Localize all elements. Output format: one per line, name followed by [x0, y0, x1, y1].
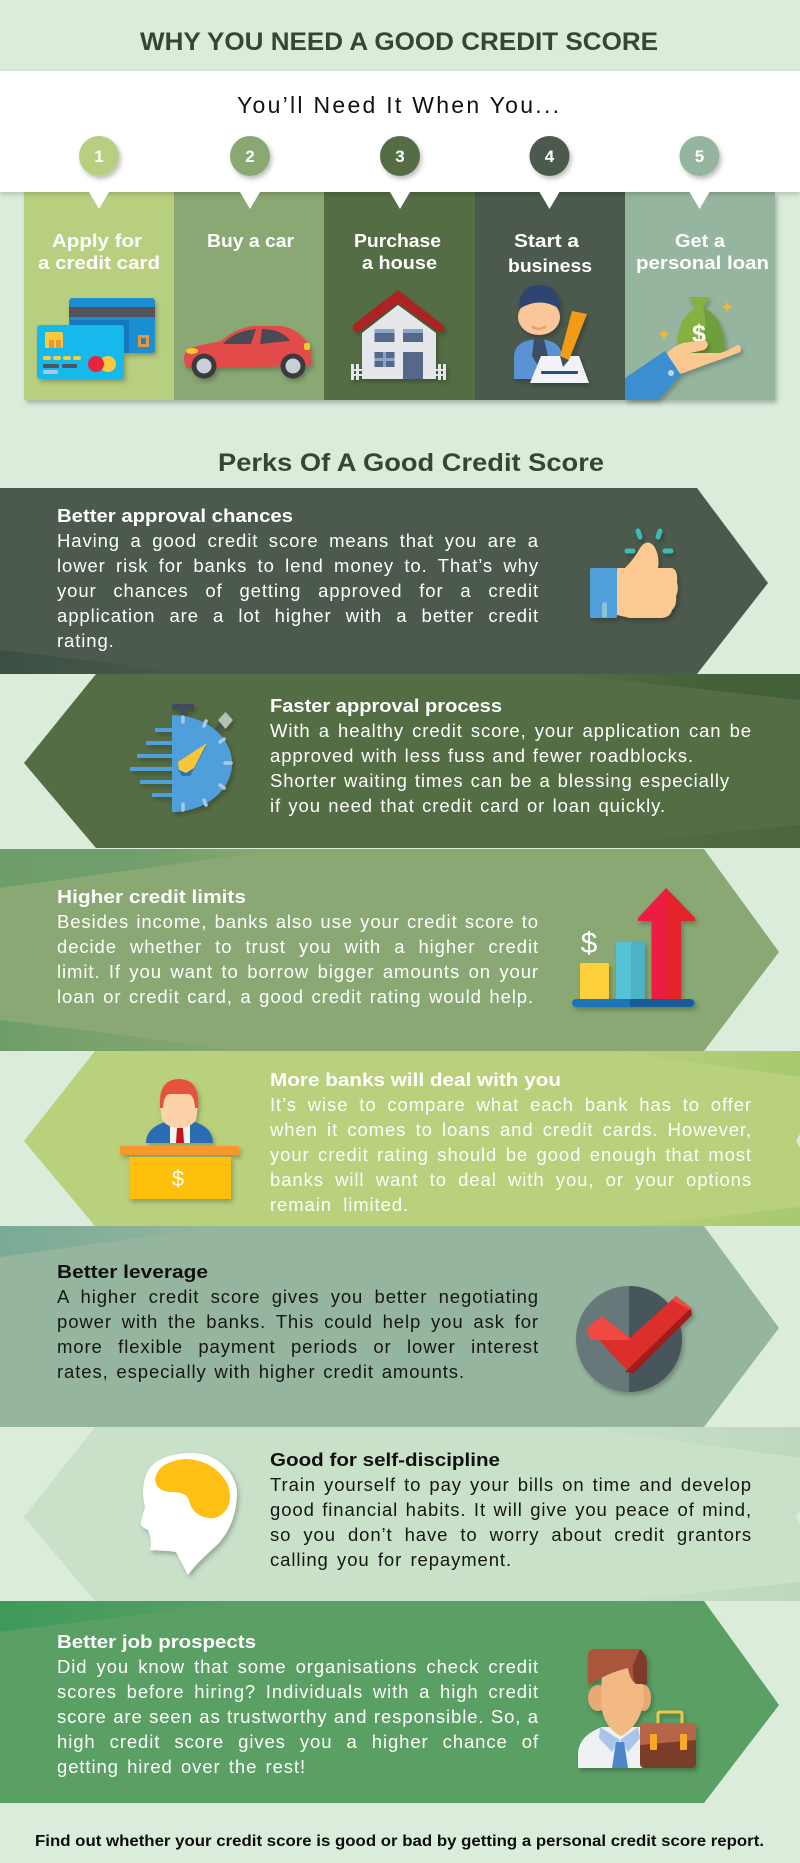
icon: car: [184, 326, 311, 378]
top section: title and five reasons: [0, 28, 800, 477]
text: leverage body: more flexible payment periods or lower interest: [57, 1336, 539, 1357]
text: discipline body: so you don’t have to worry about credit grantors: [270, 1524, 752, 1545]
panel: better approval chances: [0, 488, 768, 674]
icon: thumbs up: [590, 531, 678, 618]
icon: banker at desk: [120, 1079, 239, 1199]
text: banks body: your credit rating should be good enough that most: [270, 1144, 752, 1165]
icon: credit cards: [37, 298, 155, 379]
heading: Better leverage: [57, 1261, 208, 1282]
text: banks body: [270, 1094, 752, 1215]
card label: start a business: Start a: [514, 230, 580, 251]
number 2 marker: [230, 136, 270, 209]
panel: better leverage: [0, 1226, 779, 1427]
text: job body: scores before hiring? Individuals with a high credit: [57, 1681, 539, 1702]
icon: dollar on desk: $: [172, 1166, 184, 1191]
text: job body: Did you know that some organisations check credit: [57, 1656, 539, 1677]
icon: house: [351, 290, 446, 380]
title: WHY YOU NEED A GOOD CREDIT SCORE: [140, 28, 658, 56]
card 3 background: [324, 192, 475, 400]
text: discipline body: [270, 1474, 752, 1570]
heading: Good for self-discipline: [270, 1449, 500, 1470]
panel: faster approval process: [24, 674, 800, 848]
card label: get a personal loan: personal loan: [636, 252, 769, 273]
text: approval body: lower risk for banks to lend money to. That’s why: [57, 555, 539, 576]
panel: more banks will deal with you: [24, 1051, 800, 1226]
text: banks body: It’s wise to compare what each bank has to offer: [270, 1094, 752, 1115]
icon: checkmark badge: [576, 1286, 692, 1392]
panel: better job prospects: [0, 1601, 779, 1803]
text: faster body: if you need that credit card or loan quickly.: [270, 795, 666, 816]
text: job body: score are seen as trustworthy and responsible. So, a: [57, 1706, 539, 1727]
card label: apply for a credit card: a credit card: [38, 252, 160, 273]
card label: purchase a house: a house: [362, 252, 437, 273]
text: banks body: banks will want to deal with you, or your options: [270, 1169, 752, 1190]
icon: hand with money bag: $: [692, 320, 706, 348]
number 1 marker: [79, 136, 119, 209]
icon: rising bar chart: $: [581, 927, 598, 960]
text: job body: getting hired over the rest!: [57, 1756, 306, 1777]
text: banks body: when it comes to loans and credit cards. However,: [270, 1119, 752, 1140]
section heading: perks: Perks Of A Good Credit Score: [218, 449, 604, 477]
text: approval body: [57, 530, 539, 651]
text: leverage body: [57, 1286, 539, 1382]
number 3 marker: [380, 136, 420, 209]
heading: Better job prospects: [57, 1631, 256, 1652]
heading: Higher credit limits: [57, 886, 246, 907]
text: job body: high credit score gives you a higher chance of: [57, 1731, 539, 1752]
card 2 background: [174, 192, 324, 400]
text: approval body: rating.: [57, 630, 115, 651]
icon: stopwatch: [130, 704, 233, 812]
text: leverage body: A higher credit score gives you better negotiating: [57, 1286, 539, 1307]
text: approval body: Having a good credit score means that you are a: [57, 530, 539, 551]
heading: Faster approval process: [270, 695, 502, 716]
text: discipline body: good financial habits. It will give you peace of mind,: [270, 1499, 752, 1520]
text: faster body: [270, 720, 752, 816]
card 5 background: [625, 192, 775, 400]
number 5 marker: 5: [695, 147, 704, 166]
text: approval body: application are a lot higher with a better credit: [57, 605, 539, 626]
text: faster body: approved with less fuss and fewer roadblocks.: [270, 745, 694, 766]
icon: job candidate with briefcase: [578, 1649, 696, 1768]
card label: buy a car: Buy a car: [207, 230, 294, 251]
heading: Better approval chances: [57, 505, 293, 526]
number 5 marker: [680, 136, 720, 209]
icon: rising bar chart: [572, 888, 695, 1007]
text: limits body: decide whether to trust you with a higher credit: [57, 936, 539, 957]
panel: good for self-discipline: [24, 1427, 800, 1601]
card label: purchase a house: [354, 230, 441, 273]
card label: start a business: business: [508, 255, 592, 276]
number 3 marker: 3: [395, 147, 405, 166]
heading: More banks will deal with you: [270, 1069, 561, 1090]
card label: apply for a credit card: Apply for: [52, 230, 142, 251]
card label: apply for a credit card: [38, 230, 160, 273]
card 4 background: [475, 192, 625, 400]
text: limits body: Besides income, banks also use your credit score to: [57, 911, 539, 932]
number 4 marker: 4: [545, 147, 555, 166]
number 2 marker: 2: [245, 147, 255, 166]
icon: head with brain: [141, 1453, 237, 1575]
number 1 marker: 1: [94, 147, 104, 166]
card 1 background: [24, 192, 174, 400]
white band: [0, 71, 800, 192]
card label: get a personal loan: [636, 230, 769, 273]
panel: reason cards: [24, 192, 775, 400]
text: limits body: [57, 911, 539, 1007]
card label: start a business: [508, 230, 592, 276]
text: limits body: loan or credit card, a good credit rating would help.: [57, 986, 534, 1007]
number 4 marker: [530, 136, 570, 209]
panel: higher credit limits: [0, 849, 779, 1051]
text: job body: [57, 1656, 539, 1777]
card label: purchase a house: Purchase: [354, 230, 441, 251]
icon: hand with money bag: [625, 297, 741, 400]
text: discipline body: calling you for repayment.: [270, 1549, 512, 1570]
text: approval body: your chances of getting approved for a credit: [57, 580, 539, 601]
text: banks body: remain limited.: [270, 1194, 409, 1215]
text: leverage body: rates, especially with higher credit amounts.: [57, 1361, 465, 1382]
text: leverage body: power with the banks. This could help you ask for: [57, 1311, 539, 1332]
text: faster body: With a healthy credit score, your application can be: [270, 720, 752, 741]
subheading: You’ll Need It When You...: [237, 92, 559, 118]
card label: get a personal loan: Get a: [675, 230, 726, 251]
text: limits body: limit. If you want to borrow bigger amounts on your: [57, 961, 539, 982]
icon: businessman signing: [514, 285, 589, 383]
text: discipline body: Train yourself to pay your bills on time and develop: [270, 1474, 752, 1495]
text: faster body: Shorter waiting times can be a blessing especially: [270, 770, 730, 791]
footer note: Find out whether your credit score is good or bad by getting a personal credit score report.: [35, 1833, 764, 1850]
